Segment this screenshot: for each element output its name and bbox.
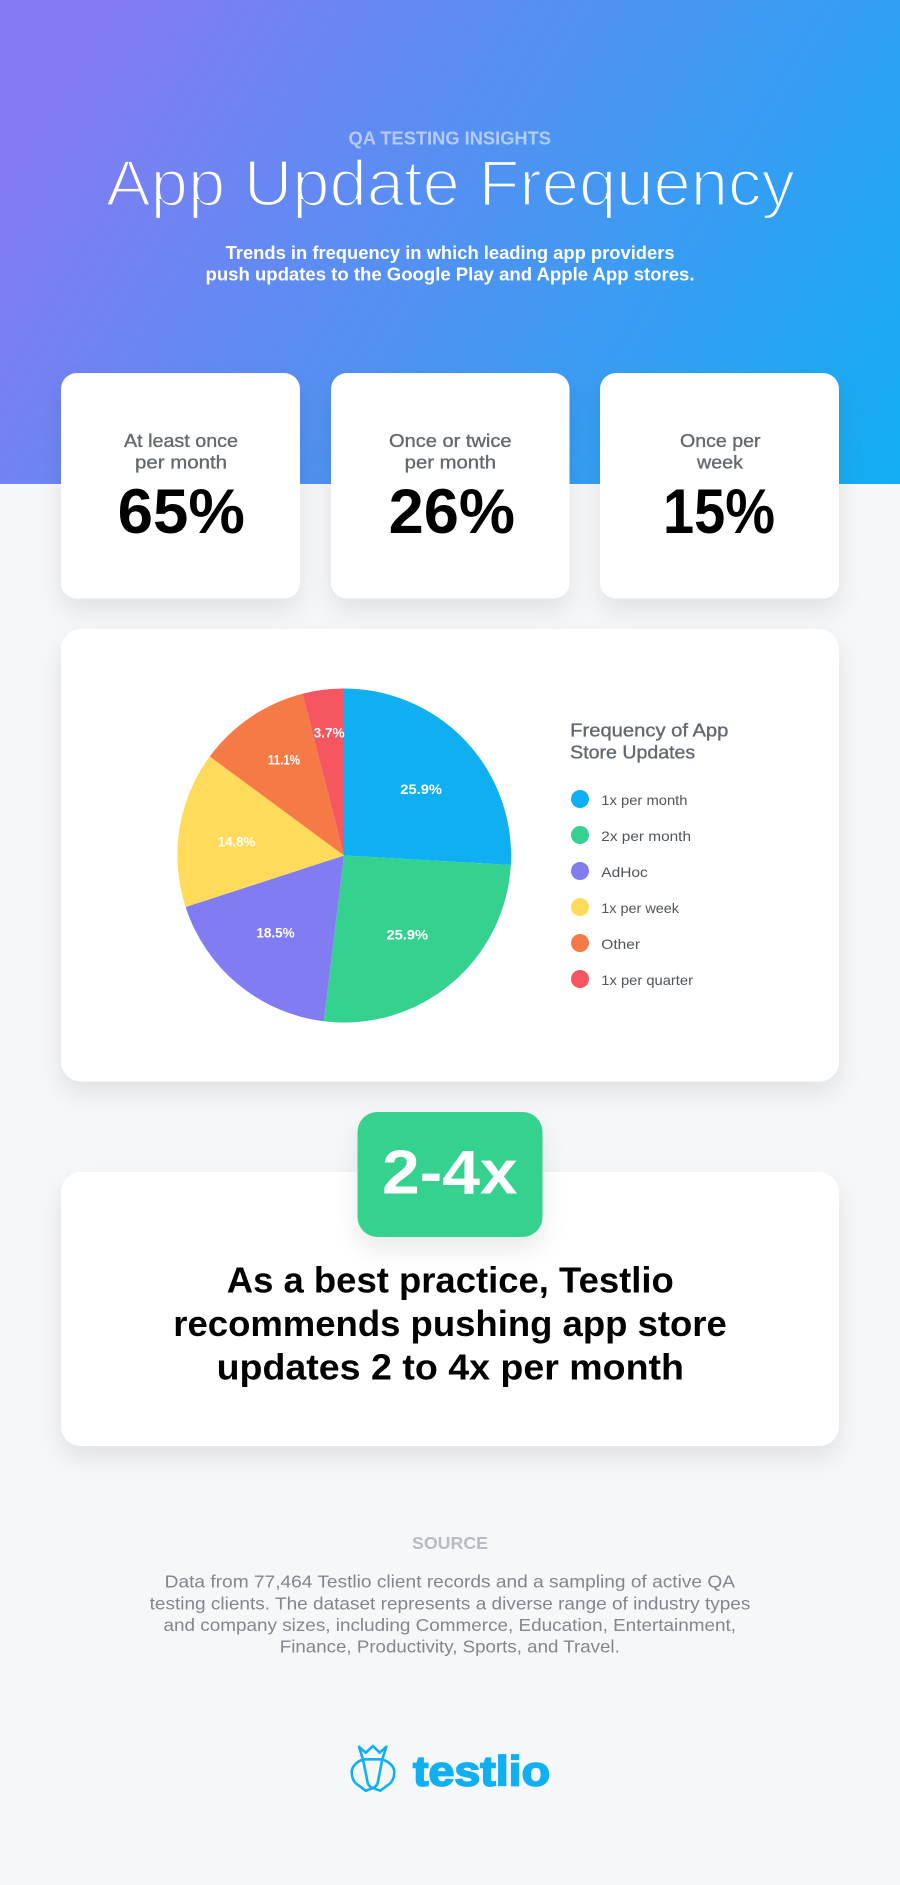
icon: crowned fox head bbox=[352, 1746, 394, 1791]
wordmark: testlio bbox=[413, 1747, 550, 1794]
legend: AdHoc bbox=[601, 864, 648, 880]
stat card: once per week: Once per bbox=[680, 430, 761, 451]
legend: Frequency of App bbox=[570, 721, 728, 741]
source text: testing clients. The dataset represents a diverse range of industry types bbox=[150, 1593, 751, 1613]
source text: Finance, Productivity, Sports, and Travel. bbox=[280, 1637, 620, 1657]
stat card: once or twice per month: 26% bbox=[389, 477, 515, 547]
logo bbox=[352, 1746, 550, 1794]
badge: 2-4x: 2-4x bbox=[382, 1138, 518, 1207]
stat card: once per week: week bbox=[696, 452, 744, 473]
pie chart: 11.1% bbox=[268, 751, 300, 767]
recommendation text: recommends pushing app store bbox=[173, 1303, 727, 1344]
stat card: at least once per month bbox=[61, 373, 300, 598]
recommendation text: updates 2 to 4x per month bbox=[217, 1346, 684, 1387]
eyebrow: QA TESTING INSIGHTS bbox=[348, 128, 551, 149]
badge: 2-4x bbox=[358, 1112, 542, 1237]
pie chart: 14.8% bbox=[218, 833, 256, 849]
stat card: at least once per month: At least once bbox=[124, 430, 238, 451]
legend: 1x per month bbox=[601, 792, 688, 808]
source text bbox=[150, 1572, 751, 1657]
subtitle: push updates to the Google Play and Apple App stores. bbox=[206, 265, 694, 285]
stat card: once or twice per month bbox=[331, 373, 570, 598]
panel: recommendation bbox=[61, 1112, 839, 1446]
legend: 2x per month bbox=[601, 828, 691, 844]
stat card: once per week: 15% bbox=[663, 477, 775, 547]
pie chart: 25.9% bbox=[400, 781, 443, 797]
subtitle bbox=[206, 243, 694, 285]
stat card: once per week bbox=[600, 373, 839, 598]
stat card: once or twice per month: Once or twice bbox=[389, 430, 512, 451]
legend: 1x per quarter bbox=[601, 972, 693, 988]
stat card: at least once per month: 65% bbox=[118, 477, 245, 547]
title: App Update Frequency bbox=[106, 147, 796, 220]
recommendation text bbox=[173, 1260, 727, 1387]
legend: Other bbox=[601, 936, 640, 952]
recommendation text: As a best practice, Testlio bbox=[227, 1260, 674, 1301]
legend bbox=[570, 721, 728, 988]
header text bbox=[106, 128, 796, 285]
source heading: SOURCE bbox=[412, 1533, 488, 1553]
pie chart bbox=[177, 688, 511, 1023]
legend: 1x per week bbox=[601, 900, 680, 916]
source text: Data from 77,464 Testlio client records and a sampling of active QA bbox=[165, 1572, 735, 1592]
stat card: once or twice per month: per month bbox=[405, 452, 496, 473]
legend: Store Updates bbox=[570, 742, 695, 762]
panel: pie chart bbox=[61, 629, 839, 1082]
pie chart: 25.9% bbox=[386, 926, 429, 942]
pie chart: 3.7% bbox=[314, 724, 345, 740]
header background bbox=[0, 0, 900, 484]
subtitle: Trends in frequency in which leading app providers bbox=[226, 243, 675, 263]
source text: and company sizes, including Commerce, Education, Entertainment, bbox=[164, 1615, 736, 1635]
pie chart: 18.5% bbox=[256, 924, 295, 940]
stat card: at least once per month: per month bbox=[135, 452, 227, 473]
